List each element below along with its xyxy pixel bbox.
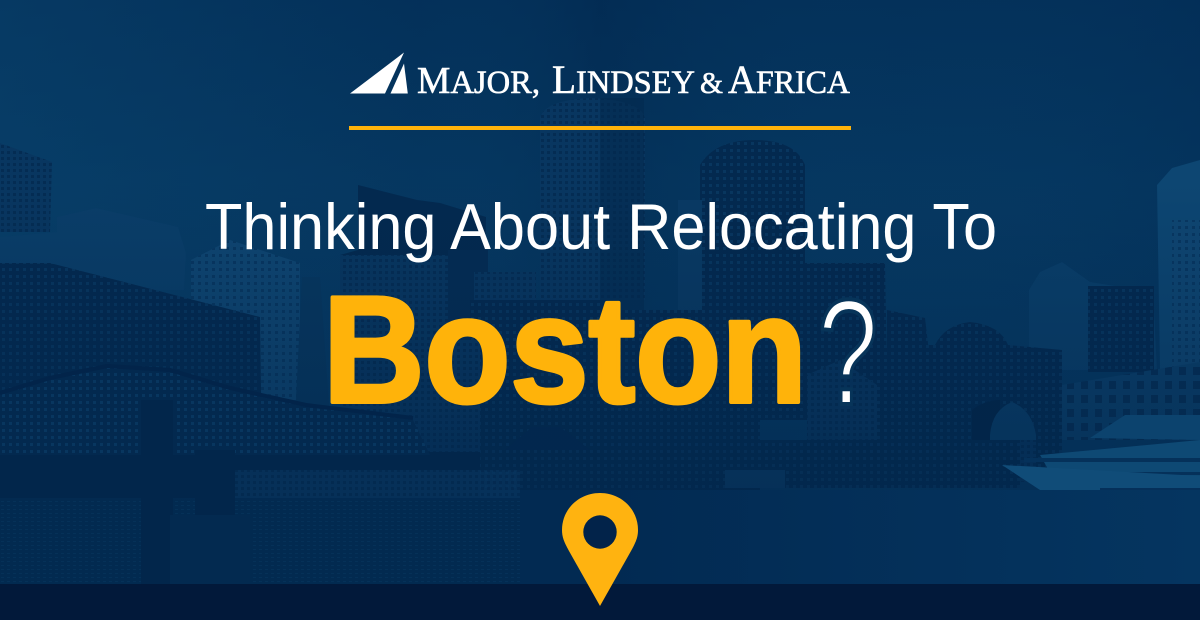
icon: location pin — [562, 493, 638, 606]
logo wordmark: MAJOR, — [417, 60, 540, 102]
question mark: ? — [818, 268, 878, 436]
logo wordmark: & — [700, 65, 723, 100]
skyline buildings — [0, 98, 1200, 490]
harbor cruise ship — [1002, 415, 1200, 500]
water — [0, 490, 1200, 584]
logo wordmark: AFRICA — [728, 57, 850, 102]
footer band — [0, 584, 1200, 620]
logo mark: white sail triangles — [350, 52, 408, 94]
logo wordmark — [417, 57, 850, 102]
heading: Boston: Boston — [323, 265, 807, 435]
logo: Major, Lindsey & Africa — [350, 52, 850, 102]
truss bridge — [0, 366, 520, 584]
divider rule — [349, 126, 851, 130]
logo wordmark: LINDSEY — [552, 57, 695, 102]
heading: thinking about relocating to: Thinking About Relocating To — [205, 190, 997, 263]
